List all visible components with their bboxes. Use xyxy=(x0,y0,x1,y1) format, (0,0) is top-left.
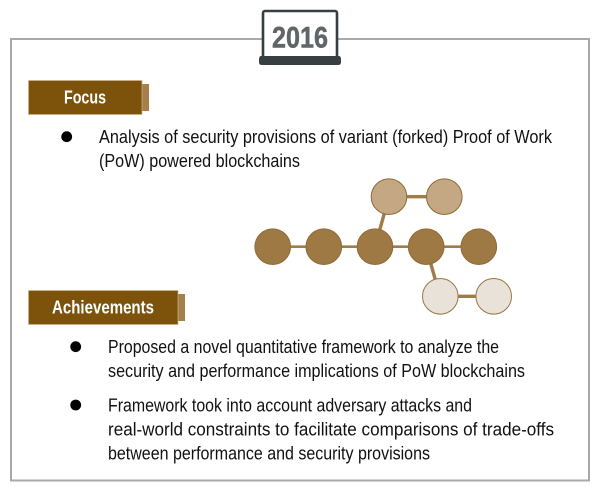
year heading: 2016 xyxy=(272,22,328,54)
icon: laptop with year xyxy=(259,11,341,65)
heading: Achievements banner: Achievements xyxy=(52,296,154,317)
text block: achievement bullet 2: real-world constraints to facilitate comparisons of trade-offs xyxy=(108,420,554,440)
text block: achievement bullet 1 xyxy=(70,337,525,381)
chart: forked blockchain diagram xyxy=(255,179,512,314)
text block: achievement bullet 2: between performance and security provisions xyxy=(108,444,430,464)
text block: achievement bullet 2 xyxy=(70,396,554,464)
heading: Focus banner: Focus xyxy=(64,86,106,107)
text block: focus bullet: (PoW) powered blockchains xyxy=(99,151,300,171)
heading: Focus banner xyxy=(28,80,149,114)
text block: achievement bullet 2: Framework took into account adversary attacks and xyxy=(108,396,472,416)
text block: focus bullet: Analysis of security provisions of variant (forked) Proof of Work xyxy=(99,127,553,147)
text block: achievement bullet 1: security and performance implications of PoW blockchains xyxy=(108,361,525,381)
text block: focus bullet xyxy=(61,127,553,171)
heading: Achievements banner xyxy=(28,290,185,324)
text block: achievement bullet 1: Proposed a novel quantitative framework to analyze the xyxy=(108,337,499,357)
